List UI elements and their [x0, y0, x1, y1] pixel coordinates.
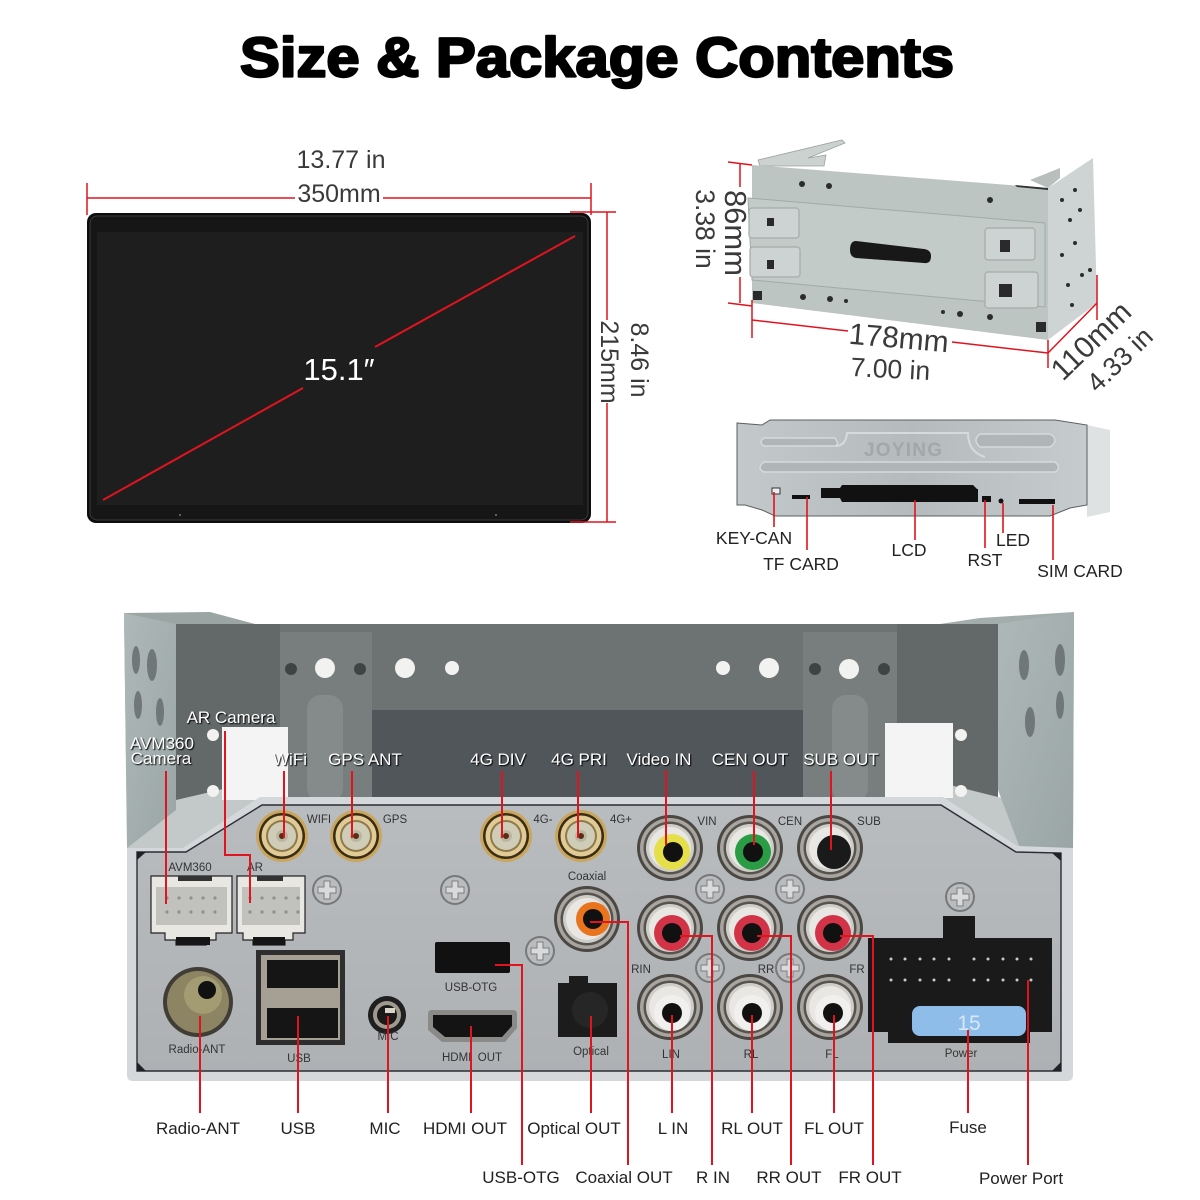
printed panel labels: FL	[825, 1049, 839, 1061]
mount clips	[749, 208, 1038, 308]
USB port	[256, 950, 345, 1045]
printed panel labels: Power	[945, 1048, 977, 1060]
overlay labels on housing: GPS ANT	[328, 750, 402, 769]
leader lines	[166, 731, 1028, 1165]
printed panel labels: RR	[758, 964, 774, 976]
chassis holes	[799, 181, 1092, 320]
overlay labels on housing: 4G PRI	[551, 750, 607, 769]
bottom labels, first row: L IN	[658, 1119, 688, 1138]
camera connectors	[151, 876, 305, 945]
overlay labels on housing: CEN OUT	[712, 750, 788, 769]
fuse: 15	[957, 1012, 981, 1035]
printed panel labels: USB-OTG	[445, 982, 497, 994]
bottom labels, second row: FR OUT	[838, 1168, 902, 1187]
slot	[850, 241, 931, 263]
width dimension: 13.77 in	[297, 146, 385, 174]
dimension: 178mm: 178mm	[848, 318, 950, 359]
printed panel labels: AR	[247, 862, 263, 874]
dimension: 178mm	[752, 300, 1048, 386]
port labels: SIM CARD	[1037, 561, 1123, 581]
printed panel labels: GPS	[383, 814, 407, 826]
printed panel labels: CEN	[778, 816, 802, 828]
screen diagonal: 15.1″	[303, 352, 375, 387]
panel: rear connector view	[124, 612, 1074, 1188]
overlay labels on housing: 4G DIV	[470, 750, 527, 769]
panel: chassis size diagram	[690, 140, 1159, 398]
bottom labels, first row: MIC	[369, 1119, 401, 1138]
leader lines	[774, 492, 1053, 560]
bottom labels, first row: USB	[281, 1119, 315, 1138]
printed panel labels: AVM360	[168, 862, 212, 874]
power connector	[868, 916, 1052, 1043]
port labels	[716, 528, 1123, 581]
bottom labels, first row: Optical OUT	[527, 1119, 621, 1138]
printed panel labels: 4G+	[610, 814, 632, 826]
title: Size & Package Contents	[240, 26, 954, 88]
printed panel labels: HDMI OUT	[442, 1052, 502, 1064]
printed panel labels: WIFI	[307, 814, 331, 826]
bottom labels, first row: Fuse	[949, 1118, 987, 1137]
printed panel labels: RIN	[631, 964, 651, 976]
port labels: LED	[996, 530, 1030, 550]
overlay labels on housing: AVM360	[130, 734, 194, 753]
front body: JOYING	[864, 440, 942, 461]
radio antenna port	[163, 967, 233, 1037]
printed panel labels: SUB	[857, 816, 881, 828]
height dimension: 215mm	[595, 320, 623, 404]
face plate	[127, 797, 1073, 1081]
screen diagonal	[103, 236, 575, 500]
bottom labels, second row: R IN	[696, 1168, 730, 1187]
overlay labels on housing: Video IN	[627, 750, 691, 769]
bottom labels, first row: HDMI OUT	[423, 1119, 507, 1138]
HDMI port	[428, 1010, 517, 1042]
optical port	[558, 976, 617, 1037]
printed panel labels: USB	[287, 1053, 311, 1065]
port labels: TF CARD	[763, 554, 839, 574]
width dimension: 350mm	[297, 180, 381, 208]
connectors	[772, 485, 1055, 504]
printed panel labels	[168, 814, 977, 1065]
screws	[312, 874, 975, 983]
dimension: 110mm: 110mm	[1045, 295, 1138, 387]
port labels: RST	[968, 550, 1003, 570]
height dimension	[570, 212, 653, 522]
front body	[737, 420, 1110, 517]
dimension: 110mm	[1045, 275, 1159, 398]
bottom labels, second row: Power Port	[979, 1169, 1063, 1188]
dimension: 86mm: 3.38 in	[690, 189, 720, 269]
printed panel labels: FR	[849, 964, 865, 976]
height dimension: 8.46 in	[625, 322, 653, 398]
printed panel labels: VIN	[697, 816, 717, 828]
dimension: 110mm: 4.33 in	[1081, 321, 1159, 398]
panel: screen size diagram	[87, 146, 653, 523]
bottom labels, first row: FL OUT	[804, 1119, 864, 1138]
bottom labels, first row: Radio-ANT	[156, 1119, 240, 1138]
mic port	[368, 996, 406, 1034]
bottom labels, second row: USB-OTG	[482, 1168, 560, 1187]
dimension: 86mm	[690, 162, 753, 306]
fuse	[912, 1006, 1026, 1036]
USB-OTG port	[435, 942, 510, 973]
printed panel labels: RL	[744, 1049, 759, 1061]
dimension: 86mm: 86mm	[718, 190, 753, 276]
overlay labels on housing: SUB OUT	[803, 750, 879, 769]
bottom labels, second row	[482, 1168, 1063, 1188]
printed panel labels: 4G-	[533, 814, 553, 826]
chassis body	[748, 140, 1097, 340]
overlay labels on housing: Camera	[131, 749, 192, 768]
rear housing	[124, 612, 1074, 848]
RCA ports	[637, 815, 863, 1040]
printed panel labels: Coaxial	[568, 871, 606, 883]
overlay labels on housing: WiFi	[273, 750, 307, 769]
width dimension	[87, 146, 591, 215]
bottom labels, first row: RL OUT	[721, 1119, 783, 1138]
screen device	[87, 213, 591, 523]
printed panel labels: MIC	[377, 1031, 399, 1043]
bottom labels, second row: RR OUT	[756, 1168, 822, 1187]
printed panel labels: Optical	[573, 1046, 609, 1058]
coaxial port	[554, 886, 620, 952]
printed panel labels: Radio-ANT	[169, 1044, 225, 1056]
overlay labels on housing	[130, 708, 879, 769]
panel: front connector view	[716, 420, 1123, 581]
printed panel labels: LIN	[662, 1049, 680, 1061]
port labels: LCD	[891, 540, 927, 560]
bottom labels, second row: Coaxial OUT	[575, 1168, 673, 1187]
dimension: 178mm: 7.00 in	[850, 352, 931, 386]
antenna ports	[256, 810, 607, 862]
overlay labels on housing: AR Camera	[187, 708, 276, 727]
port labels: KEY-CAN	[716, 528, 792, 548]
bottom labels, first row	[156, 1118, 987, 1138]
